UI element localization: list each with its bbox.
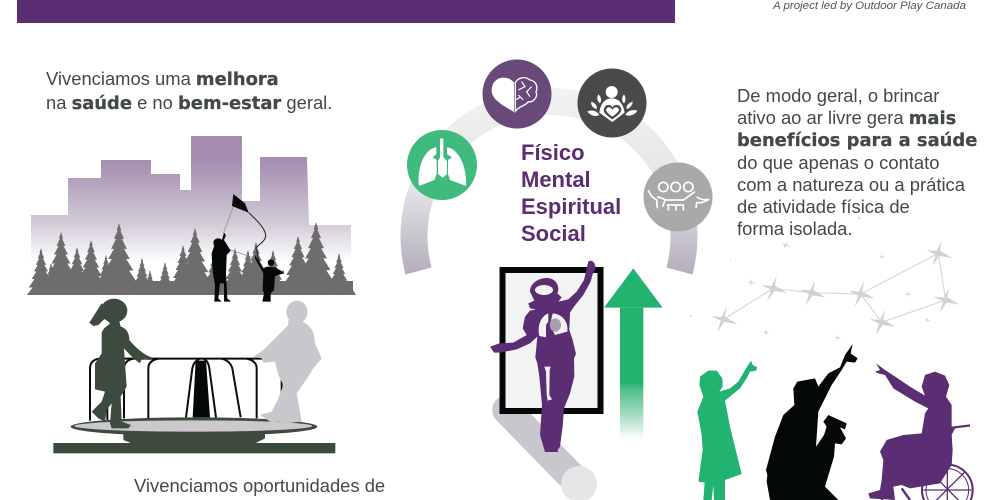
text block: health and wellbeing: na saúde e no bem-estar geral. [46,92,332,114]
central column [193,361,210,417]
icon: heart and brain [482,60,552,128]
green child [697,361,757,500]
text block: active outdoor play [737,85,977,239]
balance log [507,410,597,500]
text block: active outdoor play: benefícios para a saúde [737,130,977,151]
text block: active outdoor play: com a natureza ou a prática [737,174,966,195]
text block: health and wellbeing: Vivenciamos uma melhora [46,68,279,90]
forest [27,222,356,295]
illustration: stargazing people [697,344,973,500]
text block: active outdoor play: De modo geral, o brincar [737,85,939,106]
heading list: health domains: Social [521,221,586,246]
icon: social group [644,162,712,232]
heading list: health domains: Mental [521,167,591,192]
boy silhouette [253,301,322,423]
text block: health and wellbeing [46,68,332,114]
heading list: health domains: Físico [521,140,585,165]
icon: spiritual person with heart [578,68,646,138]
wheelchair user [868,363,973,500]
adult silhouette [212,233,231,302]
arrow: upward benefit [604,268,663,439]
illustration: city skyline and forest with kite flyers [27,136,356,302]
text block: active outdoor play: do que apenas o contato [737,152,939,173]
text block: active outdoor play: de atividade física de [737,196,910,217]
heading list: health domains [521,140,621,246]
turntable disc [71,417,317,436]
skyline [31,136,351,262]
text block: opportunities: Vivenciamos oportunidades de [134,475,385,496]
turntable hub [123,433,265,443]
illustration: star constellation [689,215,960,341]
heading list: health domains: Espiritual [521,194,621,219]
text block: active outdoor play: ativo ao ar livre gera mais [737,107,956,129]
illustration: children on merry-go-round [53,299,335,453]
benefits arc [414,101,684,271]
mirror frame [502,270,600,411]
illustration: balancing child at mirror frame [490,261,600,500]
project credit: A project led by Outdoor Play Canada [772,0,966,12]
header bar [17,0,675,23]
kite [223,194,266,262]
child figure [490,261,596,452]
child silhouette [255,255,284,302]
text block: active outdoor play: forma isolada. [737,218,853,239]
adult with binoculars [766,344,858,500]
icon: lungs [407,130,477,200]
ground base [53,443,335,453]
kite and flyers [212,194,284,302]
girl silhouette [89,299,153,428]
rails [90,359,282,421]
